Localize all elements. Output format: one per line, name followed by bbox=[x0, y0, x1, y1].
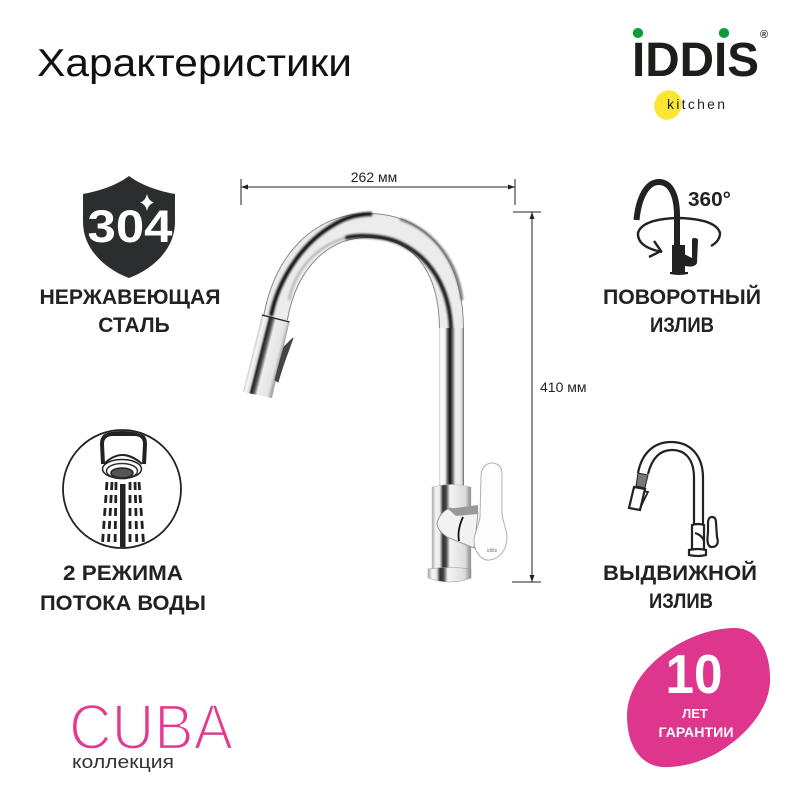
dimension: width 262 mm: 262 мм bbox=[351, 169, 397, 185]
label: two flow modes bbox=[40, 562, 206, 615]
dimension: height 410 mm bbox=[512, 212, 586, 582]
logo kitchen: kitchen bbox=[667, 96, 725, 112]
icon: aerator with two flow modes bbox=[63, 430, 181, 554]
icon: 304 shield: 304 bbox=[88, 201, 172, 252]
label: swivel spout: ИЗЛИВ bbox=[650, 314, 714, 337]
logo registered mark: ® bbox=[760, 29, 768, 41]
faucet head seam bbox=[262, 315, 290, 322]
label: two flow modes: ПОТОКА ВОДЫ bbox=[40, 592, 206, 615]
label: stainless steel bbox=[40, 286, 220, 337]
faucet spray trigger bbox=[275, 338, 293, 382]
logo: IDDIS kitchen bbox=[632, 28, 768, 124]
faucet handle cartridge bbox=[437, 508, 478, 548]
logo green dots bbox=[633, 28, 729, 38]
label: stainless steel: СТАЛЬ bbox=[98, 314, 170, 337]
icon: 304 shield bbox=[83, 176, 175, 278]
faucet foot bbox=[428, 568, 471, 582]
label: pull-out spout bbox=[603, 561, 757, 613]
faucet lever bbox=[474, 463, 507, 560]
faucet base body bbox=[432, 484, 471, 570]
collection name: коллекция bbox=[72, 752, 174, 772]
logo yellow blob bbox=[649, 86, 687, 124]
label: swivel spout bbox=[603, 285, 761, 337]
label: stainless steel: НЕРЖАВЕЮЩАЯ bbox=[40, 286, 220, 309]
title: Характеристики bbox=[37, 42, 352, 85]
badge: 10 year warranty: 10 bbox=[666, 643, 722, 705]
label: pull-out spout: ВЫДВИЖНОЙ bbox=[603, 561, 757, 585]
dimension: height 410 mm: 410 мм bbox=[540, 379, 586, 395]
faucet spout arch bbox=[271, 214, 462, 330]
faucet lever brand mark: iddis bbox=[487, 548, 498, 554]
badge: 10 year warranty bbox=[627, 628, 770, 767]
collection name: CUBA bbox=[69, 691, 233, 763]
badge: 10 year warranty: ГАРАНТИИ bbox=[658, 725, 734, 740]
faucet photo illustration bbox=[243, 214, 507, 582]
badge: 10 year warranty: ЛЕТ bbox=[682, 706, 708, 721]
dimension: width 262 mm bbox=[241, 169, 515, 205]
logo wordmark: IDDIS bbox=[632, 34, 759, 87]
faucet pull-out head bbox=[243, 315, 290, 398]
label: two flow modes: 2 РЕЖИМА bbox=[63, 562, 183, 585]
icon: 360 swivel spout: 360° bbox=[688, 189, 731, 211]
label: pull-out spout: ИЗЛИВ bbox=[649, 590, 713, 613]
label: swivel spout: ПОВОРОТНЫЙ bbox=[603, 285, 761, 309]
icon: 360 swivel spout bbox=[636, 182, 731, 275]
faucet vertical pipe bbox=[439, 328, 464, 490]
icon: pull-out spout bbox=[629, 442, 718, 556]
